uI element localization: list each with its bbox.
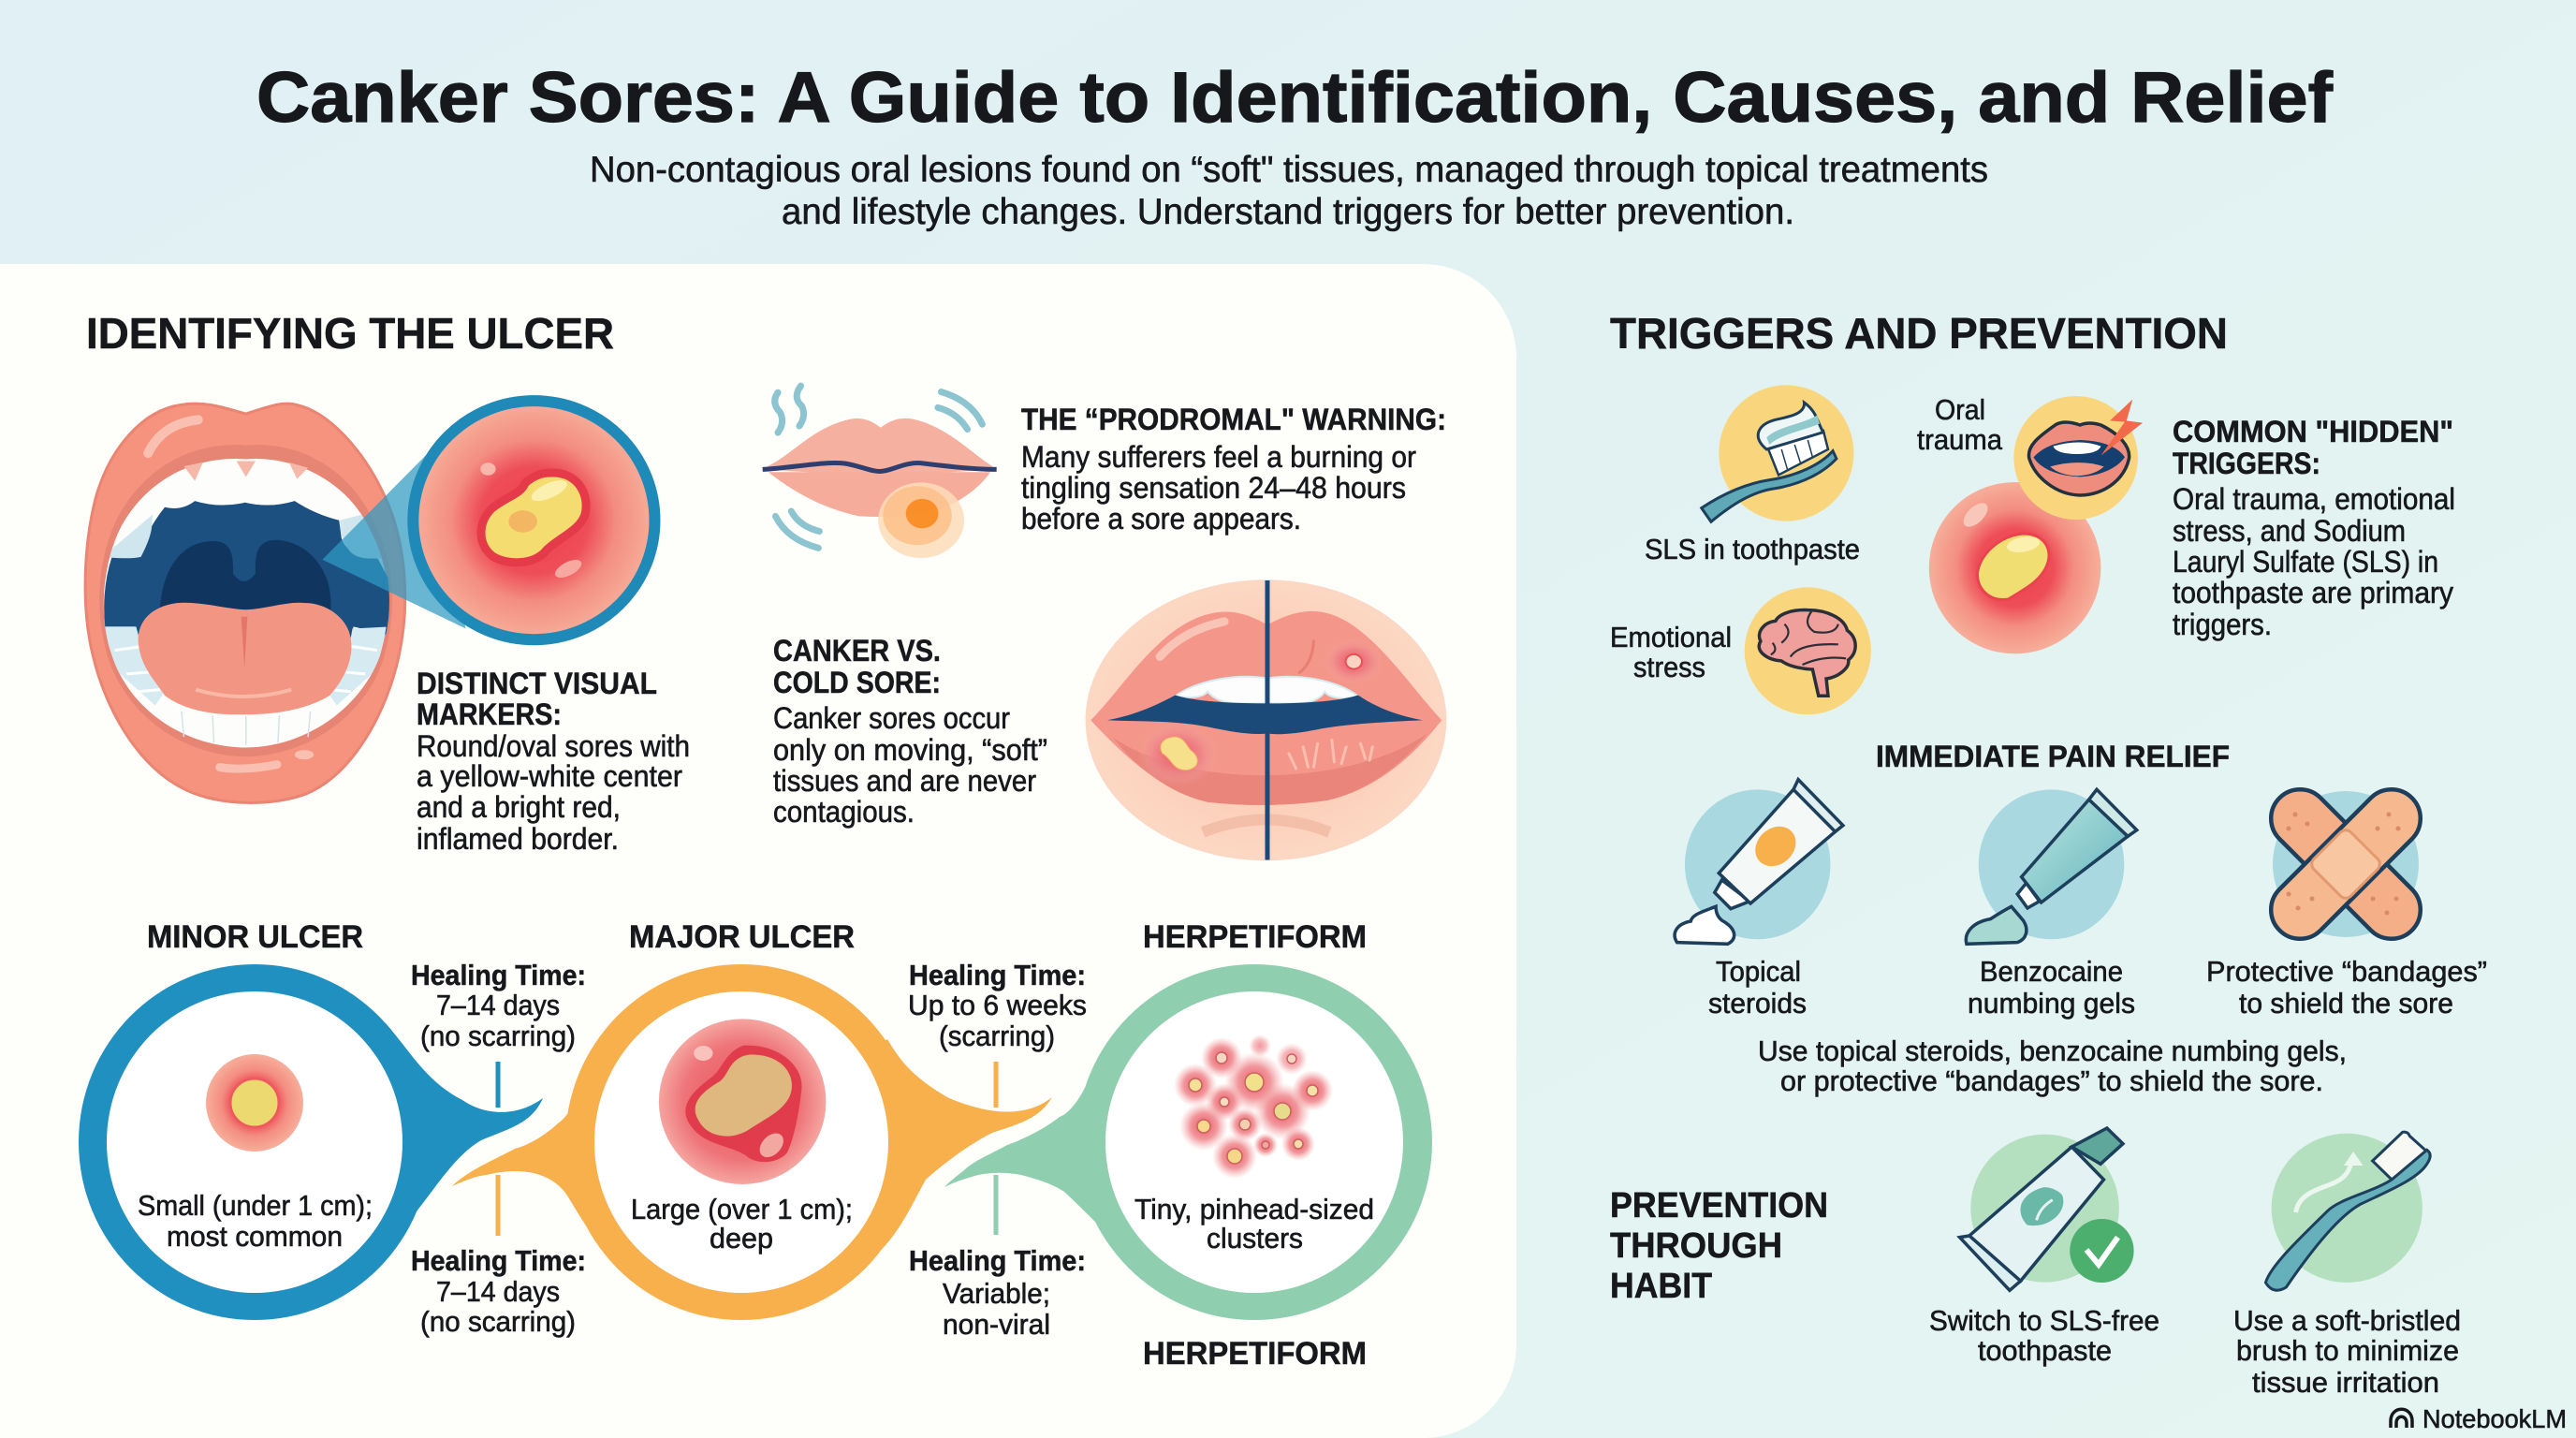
labels: healing times bbox=[411, 959, 1087, 1341]
labels: healing times: (scarring) bbox=[939, 1020, 1055, 1052]
labels: ulcer descriptions: Large (over 1 cm); bbox=[631, 1193, 853, 1225]
labels: healing times: non-viral bbox=[943, 1308, 1050, 1341]
labels: ulcer type headings: HERPETIFORM bbox=[1143, 919, 1367, 955]
labels: ulcer type headings: HERPETIFORM bbox=[1143, 1336, 1367, 1372]
text: prodromal warning: THE “PRODROMAL" WARNING: bbox=[1021, 403, 1446, 436]
text: common hidden triggers: stress, and Sodium bbox=[2173, 514, 2406, 548]
gum wedges bbox=[183, 462, 308, 481]
text: distinct visual markers bbox=[417, 667, 690, 856]
lower teeth lines bbox=[182, 712, 311, 745]
text: canker vs cold sore bbox=[773, 634, 1047, 829]
subtitle bbox=[590, 150, 1988, 232]
icon: open mouth with magnified ulcer bbox=[85, 401, 654, 802]
throat bbox=[160, 540, 330, 610]
labels: pain relief options bbox=[1708, 955, 2487, 1020]
heading: immediate pain relief: IMMEDIATE PAIN RELIEF bbox=[1876, 740, 2230, 773]
text: common hidden triggers: COMMON "HIDDEN" bbox=[2173, 415, 2453, 448]
subtitle: Non-contagious oral lesions found on “soft" tissues, managed through topical treatments bbox=[590, 150, 1988, 190]
icon: toothbrush with paste bbox=[1702, 385, 1853, 521]
text: pain relief summary: or protective “bandages” to shield the sore. bbox=[1780, 1064, 2323, 1097]
subtitle: and lifestyle changes. Understand triggers for better prevention. bbox=[782, 192, 1794, 232]
labels: prevention habits bbox=[1929, 1304, 2461, 1399]
labels: ulcer descriptions: most common bbox=[167, 1220, 343, 1253]
text: canker vs cold sore: COLD SORE: bbox=[773, 666, 941, 699]
icon: benzocaine gel tube bbox=[1966, 789, 2137, 944]
icon: soft-bristled toothbrush bbox=[2265, 1132, 2430, 1290]
minor ulcer sore bbox=[206, 1054, 303, 1152]
text: distinct visual markers: a yellow-white center bbox=[417, 759, 682, 793]
side teeth bbox=[100, 514, 391, 706]
label: oral trauma: trauma bbox=[1917, 423, 2003, 456]
labels: pain relief options: Benzocaine bbox=[1980, 955, 2123, 988]
heading: prevention through habit bbox=[1610, 1186, 1828, 1306]
text: common hidden triggers: Lauryl Sulfate (SLS) in bbox=[2173, 545, 2438, 579]
label: oral trauma bbox=[1917, 393, 2003, 456]
text: distinct visual markers: DISTINCT VISUAL bbox=[417, 667, 657, 700]
labels: pain relief options: steroids bbox=[1708, 987, 1807, 1020]
labels: ulcer descriptions: clusters bbox=[1207, 1222, 1303, 1255]
labels: healing times: (no scarring) bbox=[420, 1305, 576, 1338]
icon: hidden trigger sore bbox=[1929, 482, 2100, 653]
panel: identifying the ulcer bbox=[0, 264, 1516, 1438]
text: prodromal warning: Many sufferers feel a burning or bbox=[1021, 440, 1416, 474]
labels: pain relief options: Topical bbox=[1716, 955, 1801, 988]
labels: prevention habits: tissue irritation bbox=[2252, 1366, 2439, 1399]
text: common hidden triggers: toothpaste are primary bbox=[2173, 576, 2453, 609]
labels: ulcer type headings: MINOR ULCER bbox=[147, 919, 363, 955]
labels: prevention habits: Switch to SLS-free bbox=[1929, 1304, 2159, 1337]
text: common hidden triggers: TRIGGERS: bbox=[2173, 447, 2320, 480]
labels: prevention habits: Use a soft-bristled bbox=[2233, 1304, 2461, 1337]
labels: healing times: Healing Time: bbox=[411, 959, 586, 991]
labels: prevention habits: brush to minimize bbox=[2236, 1334, 2459, 1367]
icon: sls-free toothpaste bbox=[1960, 1128, 2134, 1290]
text: pain relief summary bbox=[1758, 1034, 2347, 1097]
herpetiform cluster bbox=[1174, 1034, 1333, 1179]
labels: healing times: Up to 6 weeks bbox=[908, 989, 1087, 1021]
heading: prevention through habit: THROUGH bbox=[1610, 1226, 1782, 1266]
icon: crossed bandages bbox=[2259, 777, 2433, 951]
labels: prevention habits: toothpaste bbox=[1978, 1334, 2112, 1367]
text: canker vs cold sore: contagious. bbox=[773, 795, 915, 829]
text: canker vs cold sore: tissues and are never bbox=[773, 764, 1036, 798]
icon: brain bbox=[1745, 587, 1871, 714]
heading: identifying the ulcer: IDENTIFYING THE ULCER bbox=[86, 309, 614, 358]
icon: topical steroid tube bbox=[1675, 780, 1843, 944]
labels: ulcer type headings bbox=[147, 919, 1367, 1372]
text: prodromal warning: before a sore appears. bbox=[1021, 502, 1301, 536]
text: distinct visual markers: and a bright red, bbox=[417, 790, 621, 824]
text: distinct visual markers: Round/oval sores with bbox=[417, 729, 690, 763]
text: prodromal warning: tingling sensation 24–48 hours bbox=[1021, 471, 1406, 505]
labels: healing times: Healing Time: bbox=[909, 1244, 1086, 1277]
text: distinct visual markers: MARKERS: bbox=[417, 697, 562, 731]
labels: ulcer type headings: MAJOR ULCER bbox=[629, 919, 855, 955]
label: emotional stress: stress bbox=[1633, 651, 1705, 683]
palate bbox=[104, 501, 389, 640]
icon: tingling lips bbox=[763, 386, 997, 558]
labels: pain relief options: to shield the sore bbox=[2239, 987, 2453, 1020]
text: canker vs cold sore: Canker sores occur bbox=[773, 701, 1010, 735]
labels: pain relief options: numbing gels bbox=[1968, 987, 2135, 1020]
labels: ulcer descriptions: deep bbox=[710, 1222, 773, 1255]
icon: canker vs cold sore lips comparison bbox=[1086, 580, 1446, 860]
outer lips bbox=[85, 404, 405, 802]
labels: healing times: Healing Time: bbox=[411, 1244, 586, 1277]
text: common hidden triggers bbox=[2173, 415, 2455, 641]
labels: healing times: Healing Time: bbox=[909, 959, 1086, 991]
label: sls in toothpaste: SLS in toothpaste bbox=[1645, 533, 1860, 565]
ulcer types diagram bbox=[79, 919, 1432, 1372]
zoom cone bbox=[322, 451, 465, 628]
label: oral trauma: Oral bbox=[1935, 393, 1985, 426]
notebooklm logo: NotebookLM bbox=[2422, 1404, 2567, 1433]
lip highlights bbox=[148, 419, 198, 453]
text: prodromal warning bbox=[1021, 403, 1446, 536]
title: Canker Sores: A Guide to Identification, Causes, and Relief bbox=[256, 58, 2334, 138]
icon: oral trauma mouth bbox=[2013, 396, 2143, 520]
labels: ulcer descriptions: Tiny, pinhead-sized bbox=[1134, 1193, 1374, 1225]
magnifier circle bbox=[413, 401, 654, 639]
minor ulcer ring bbox=[79, 964, 543, 1320]
labels: healing times: (no scarring) bbox=[420, 1020, 576, 1052]
heading: prevention through habit: HABIT bbox=[1610, 1267, 1712, 1306]
labels: healing times: 7–14 days bbox=[436, 1275, 560, 1308]
major ulcer ring bbox=[452, 964, 1052, 1320]
text: distinct visual markers: inflamed border. bbox=[417, 822, 619, 856]
label: emotional stress: Emotional bbox=[1610, 621, 1732, 653]
label: emotional stress bbox=[1610, 621, 1732, 683]
labels: healing times: Variable; bbox=[943, 1277, 1050, 1310]
text: pain relief summary: Use topical steroids, benzocaine numbing gels, bbox=[1758, 1034, 2347, 1067]
labels: ulcer descriptions bbox=[138, 1189, 1374, 1255]
text: canker vs cold sore: CANKER VS. bbox=[773, 634, 941, 668]
mouth interior base bbox=[104, 459, 388, 748]
labels: ulcer descriptions: Small (under 1 cm); bbox=[138, 1189, 373, 1222]
heading: triggers and prevention: TRIGGERS AND PREVENTION bbox=[1610, 309, 2228, 358]
text: common hidden triggers: Oral trauma, emotional bbox=[2173, 482, 2455, 516]
major ulcer sore bbox=[659, 1019, 826, 1184]
labels: healing times: 7–14 days bbox=[436, 989, 560, 1021]
herpetiform ring bbox=[944, 964, 1432, 1320]
text: canker vs cold sore: only on moving, “soft” bbox=[773, 733, 1047, 767]
labels: pain relief options: Protective “bandages” bbox=[2206, 955, 2487, 988]
text: common hidden triggers: triggers. bbox=[2173, 608, 2272, 641]
heading: prevention through habit: PREVENTION bbox=[1610, 1186, 1828, 1225]
tongue bbox=[139, 603, 351, 714]
ulcer detail bbox=[481, 473, 586, 563]
